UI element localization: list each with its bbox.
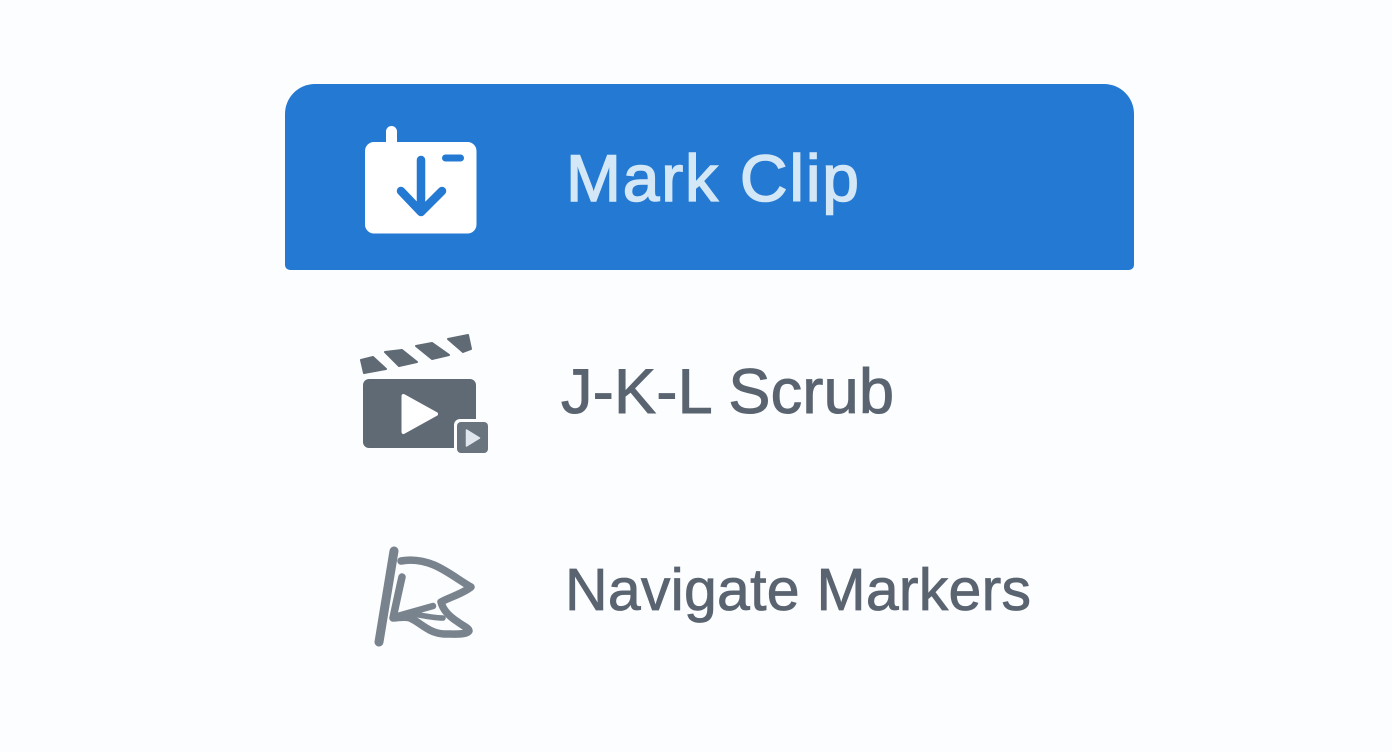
label: Navigate Markers: Navigate Markers bbox=[565, 557, 1031, 623]
label: Mark Clip: Mark Clip bbox=[566, 141, 859, 215]
panel: Mark Clip row bbox=[285, 84, 1134, 270]
icon: waving flag outline bbox=[379, 551, 471, 642]
icon: clapperboard with play buttons bbox=[361, 335, 491, 456]
icon: calendar clip with down arrow bbox=[365, 126, 476, 234]
panel: J-K-L Scrub row bbox=[361, 335, 894, 456]
panel: Navigate Markers row bbox=[379, 551, 1031, 642]
row background: blue highlight bbox=[285, 84, 1134, 270]
label: J-K-L Scrub: J-K-L Scrub bbox=[561, 357, 894, 427]
